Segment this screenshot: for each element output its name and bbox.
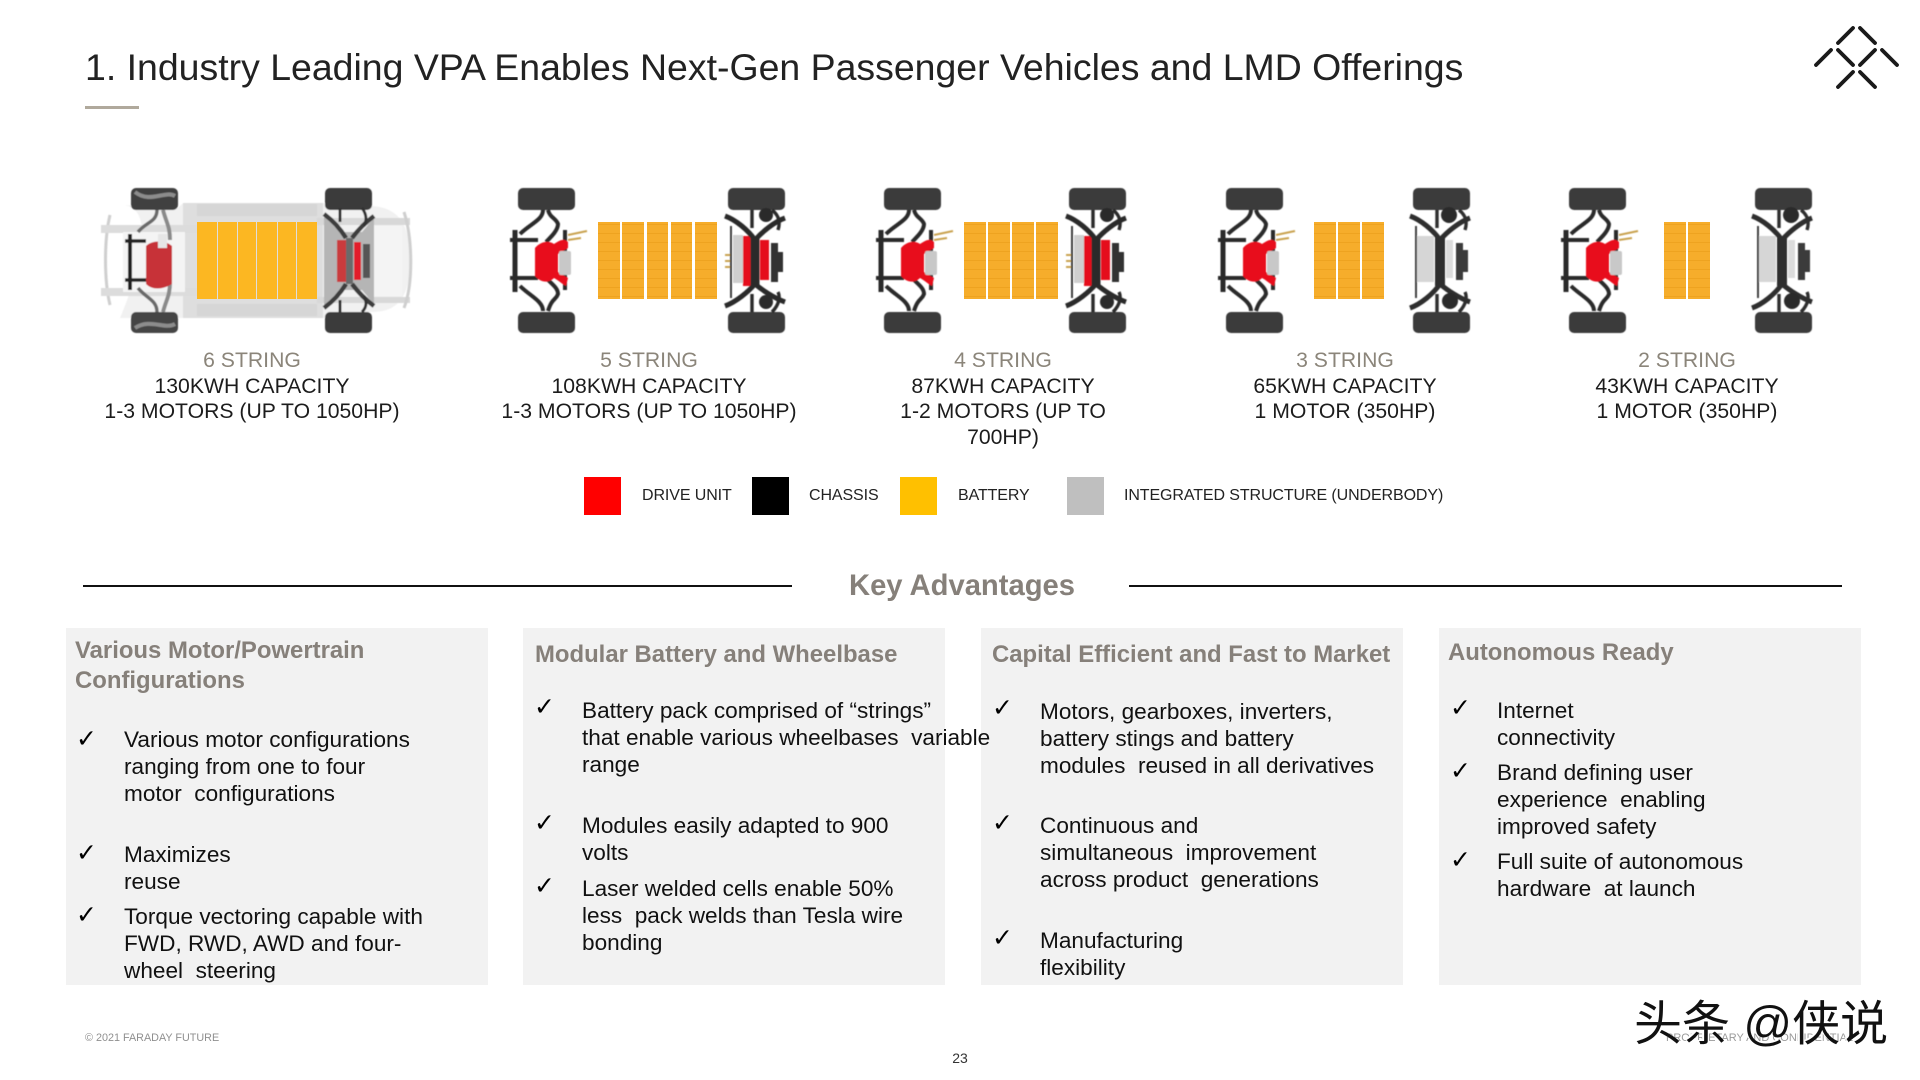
check icon: ✓	[992, 808, 1013, 837]
panel: motor configurations	[66, 628, 488, 985]
check icon: ✓	[76, 900, 97, 929]
check icon: ✓	[534, 808, 555, 837]
legend swatch: chassis	[752, 477, 789, 515]
check icon: ✓	[1450, 756, 1471, 785]
bullet text: Continuous and simultaneous improvement across product generations	[1040, 813, 1319, 892]
panel heading: Autonomous Ready	[1448, 639, 1674, 666]
legend swatch: battery	[900, 477, 937, 515]
panel: autonomous ready	[1439, 628, 1861, 985]
left divider	[83, 585, 792, 587]
bullet text: Manufacturing flexibility	[1040, 928, 1183, 980]
page number: 23	[952, 1050, 968, 1066]
chassis platform illustrations	[100, 187, 1814, 334]
bullet text: Maximizes reuse	[124, 842, 231, 894]
chassis: 2 string	[1561, 188, 1812, 333]
icon: Faraday Future logo	[1814, 26, 1899, 89]
bullet text: Full suite of autonomous hardware at launch	[1497, 849, 1743, 901]
title: 1. Industry Leading VPA Enables Next-Gen Passenger Vehicles and LMD Offerings	[85, 46, 1463, 88]
chassis: 6 string	[101, 188, 411, 333]
check icon: ✓	[534, 692, 555, 721]
bullet text: Modules easily adapted to 900 volts	[582, 813, 888, 865]
footer confidentiality: PROPRIETARY AND CONFIDENTIAL	[1666, 1032, 1853, 1044]
check icon: ✓	[76, 838, 97, 867]
watermark: 头条 @侠说	[1634, 998, 1888, 1051]
chassis: 5 string	[510, 188, 785, 333]
bullet text: Torque vectoring capable with FWD, RWD, AWD and four- wheel steering	[124, 904, 423, 983]
title underline	[85, 106, 139, 109]
footer copyright: © 2021 FARADAY FUTURE	[85, 1032, 219, 1044]
chassis: 3 string	[1218, 188, 1470, 333]
panel heading: Various Motor/Powertrain Configurations	[75, 637, 364, 694]
legend label: integrated structure: INTEGRATED STRUCTURE (UNDERBODY)	[1124, 487, 1443, 504]
panel heading: Capital Efficient and Fast to Market	[992, 641, 1390, 668]
bullet text: Battery pack comprised of “strings” that enable various wheelbases variable range	[582, 698, 990, 777]
legend	[584, 477, 1443, 515]
bullet text: Laser welded cells enable 50% less pack welds than Tesla wire bonding	[582, 876, 903, 955]
legend label: chassis: CHASSIS	[809, 487, 879, 504]
panel: modular battery	[523, 628, 945, 985]
bullet text: Various motor configurations ranging from one to four motor configurations	[124, 727, 410, 806]
caption: 6 string: 6 STRING 130KWH CAPACITY 1-3 MOTORS (UP TO 1050HP)	[104, 349, 400, 423]
bullet text: Motors, gearboxes, inverters, battery stings and battery modules reused in all derivatives	[1040, 699, 1374, 778]
caption: 2 string: 2 STRING 43KWH CAPACITY 1 MOTOR (350HP)	[1595, 349, 1779, 423]
right divider	[1129, 585, 1842, 587]
legend label: battery: BATTERY	[958, 487, 1030, 504]
bullet text: Internet connectivity	[1497, 698, 1615, 750]
caption: 5 string: 5 STRING 108KWH CAPACITY 1-3 MOTORS (UP TO 1050HP)	[501, 349, 797, 423]
check icon: ✓	[1450, 845, 1471, 874]
legend label: drive unit: DRIVE UNIT	[642, 487, 732, 504]
check icon: ✓	[992, 923, 1013, 952]
panel: capital efficient	[981, 628, 1403, 985]
check icon: ✓	[992, 693, 1013, 722]
caption: 4 string: 4 STRING 87KWH CAPACITY 1-2 MOTORS (UP TO 700HP)	[900, 349, 1106, 449]
legend swatch: integrated structure	[1067, 477, 1104, 515]
chassis: 4 string	[876, 188, 1126, 333]
heading: key advantages: Key Advantages	[849, 570, 1075, 602]
bullet text: Brand defining user experience enabling improved safety	[1497, 760, 1706, 839]
caption: 3 string: 3 STRING 65KWH CAPACITY 1 MOTOR (350HP)	[1253, 349, 1437, 423]
panel heading: Modular Battery and Wheelbase	[535, 641, 897, 668]
check icon: ✓	[534, 871, 555, 900]
check icon: ✓	[76, 724, 97, 753]
check icon: ✓	[1450, 693, 1471, 722]
legend swatch: drive unit	[584, 477, 621, 515]
